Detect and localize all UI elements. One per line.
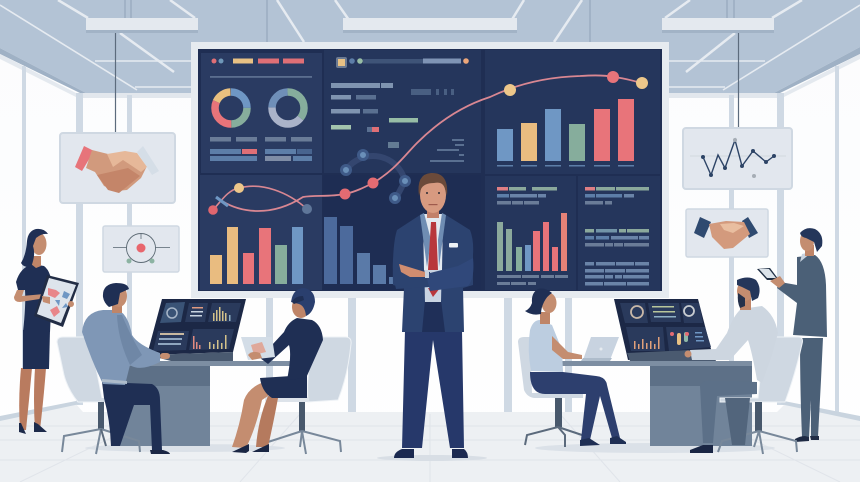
panel: top right bars (485, 50, 660, 174)
monitor: right (614, 299, 716, 361)
bar chart top right (497, 99, 634, 166)
trousers (402, 330, 464, 448)
desk: left (113, 361, 293, 446)
ceiling (0, 0, 860, 98)
panel: top middle table (324, 50, 481, 173)
crossed arms (393, 258, 430, 289)
laptop (581, 337, 619, 361)
poster: handshake large (60, 133, 175, 203)
node arc (342, 150, 410, 202)
chair: seated man right (718, 337, 802, 454)
person: seated woman left (232, 288, 323, 453)
tie (428, 222, 440, 297)
lapels (420, 213, 446, 267)
neck (427, 207, 439, 218)
person: seated man left (82, 283, 170, 454)
person: seated man right (684, 278, 778, 453)
face (420, 177, 446, 213)
panel: top left donuts (201, 53, 322, 173)
trend line (208, 71, 648, 215)
hair (418, 173, 447, 196)
shoes (394, 449, 468, 458)
shirt (423, 214, 443, 302)
person: seated woman right (525, 288, 626, 446)
panel: bottom right text (578, 176, 660, 290)
panel: bottom left bars (200, 175, 322, 290)
person: central presenter (393, 173, 473, 458)
poster: handshake small (686, 209, 768, 257)
chair: seated woman left (265, 337, 351, 454)
poster: line chart (683, 128, 792, 189)
jacket opening (422, 300, 445, 332)
panel: bottom right bars (485, 176, 576, 290)
jacket (393, 215, 473, 332)
person: standing man right (757, 228, 827, 442)
chair: seated man left (57, 337, 140, 454)
donut chart right (272, 92, 304, 124)
monitor: left (147, 299, 246, 361)
donut chart left (215, 92, 247, 124)
desk: right (550, 361, 752, 446)
poster: target diagram (103, 226, 179, 272)
ceiling light fixtures (86, 18, 774, 133)
person: woman holding tablet (14, 229, 79, 434)
pocket square (449, 243, 458, 248)
dashboard wall screen (191, 42, 669, 298)
chair: seated woman right (518, 337, 583, 447)
floor (0, 401, 860, 482)
panel: bottom middle bars (323, 175, 481, 290)
window frames (22, 66, 839, 416)
